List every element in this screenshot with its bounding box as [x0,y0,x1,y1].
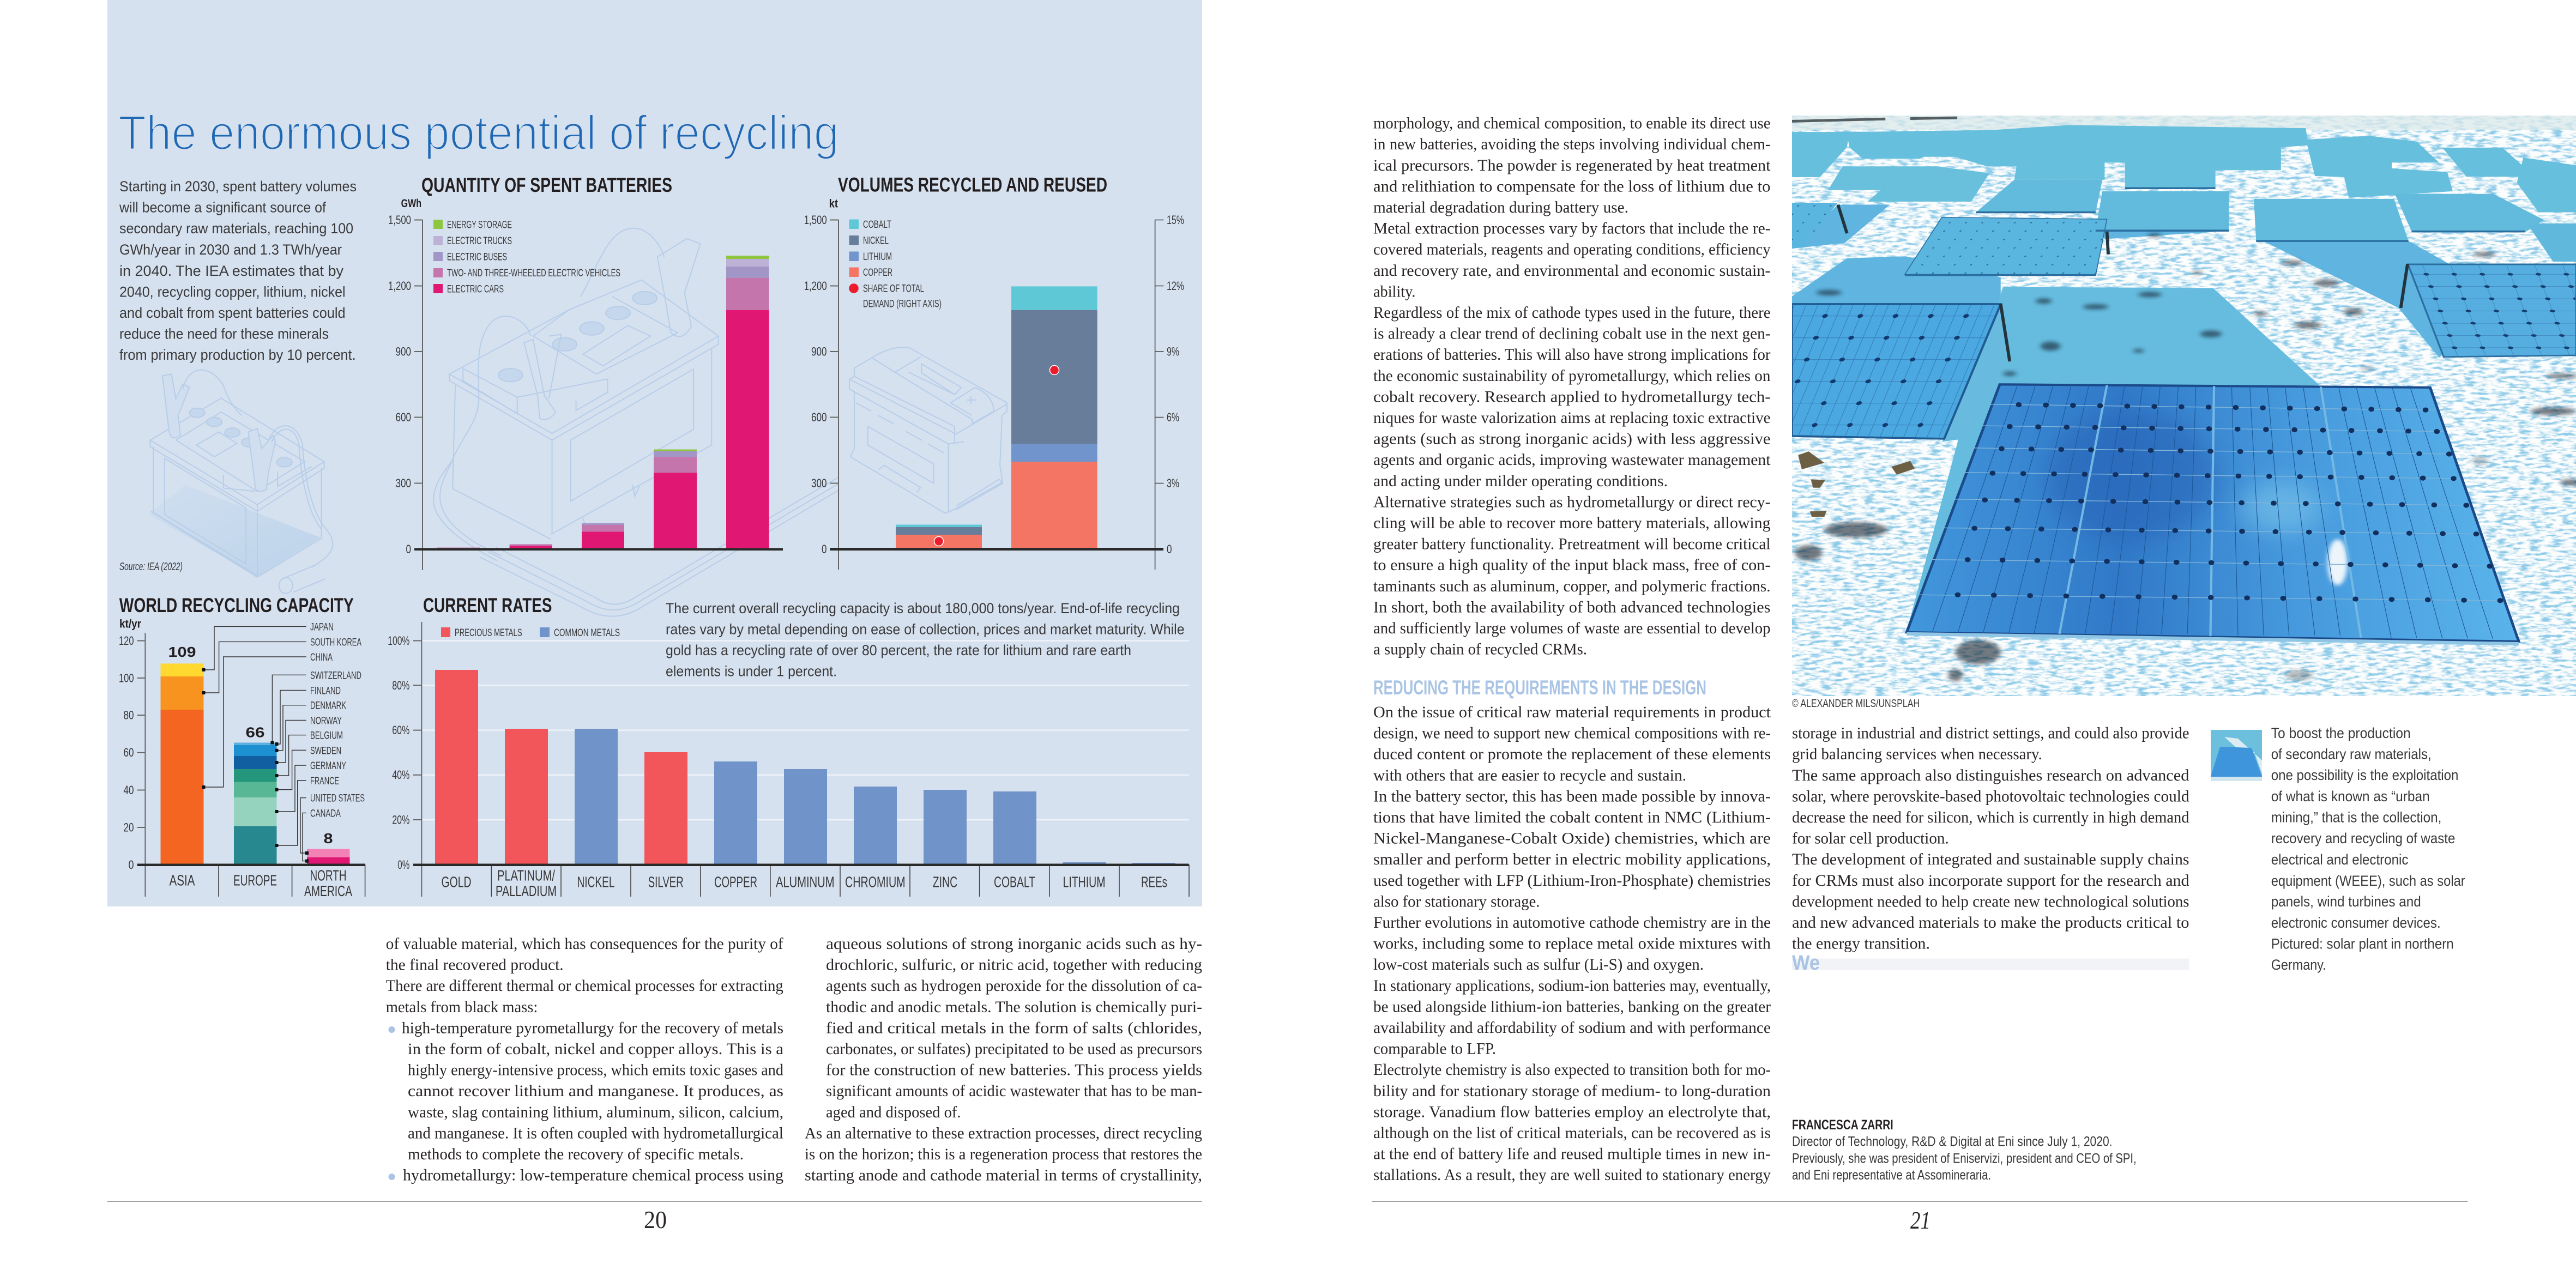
text column: right page, column 2: grid balancing services when necessary. [1792,745,2042,763]
text column: right page, column 2: storage in industrial and district settings, and could also provide [1792,724,2189,742]
illustration: side battery [849,347,1007,513]
text column: right page, column 1 top: cling will be able to recover more battery materials, allowing [1373,514,1771,532]
text column: right page, column 1 top: the economic sustainability of pyrometallurgy, which relies on [1373,367,1771,385]
text column: right page, column 1 bottom: availability and affordability of sodium and with performance [1373,1019,1771,1037]
capacity text block: rates vary by metal depending on ease of collection, prices and market maturity. While [666,621,1185,638]
stacked bars [896,286,1097,548]
text column: right page, column 1 bottom: storage. Vanadium flow batteries employ an electrolyte that, [1373,1103,1771,1121]
text column: right page, column 2: for solar cell production. [1792,830,1949,848]
legend: COPPER [863,267,892,279]
legend: NICKEL [863,235,889,246]
country labels: NORWAY [310,715,342,727]
bar: Asia [160,663,204,863]
text column: right page, column 1 bottom: works, including some to replace metal oxide mixtures with [1373,935,1771,953]
metal labels: NICKEL [577,873,615,890]
sidebar caption: mining,” that is the collection, [2271,809,2441,826]
text column: right page, column 1 top: is already a clear trend of declining cobalt use in the next gen- [1373,325,1771,343]
legend: ELECTRIC CARS [447,283,504,295]
legend: ELECTRIC BUSES [447,252,507,263]
sidebar caption: one possibility is the exploitation [2271,767,2458,783]
text column: left page, column 1: high-temperature pyrometallurgy for the recovery of metals [402,1019,783,1037]
sidebar caption: of secondary raw materials, [2271,746,2432,763]
y axis: 0 [406,542,411,556]
text column: right page, column 1 top: taminants such as aluminum, copper, and polymeric fractions. [1373,577,1771,595]
metal labels: SILVER [648,873,684,890]
left axis [804,213,838,570]
author bio [1792,1117,2137,1183]
text column: right page, column 1 top: Metal extraction processes vary by factors that include the re- [1373,220,1771,238]
text column: right page, column 1 top: material degradation during battery use. [1373,198,1628,216]
country labels: CANADA [310,808,341,819]
metal labels: COBALT [994,873,1035,890]
metal labels: ALUMINUM [776,873,834,890]
text column: right page, column 1 top: cobalt recovery. Research applied to hydrometallurgy tech- [1373,388,1771,406]
text column: right page, column 1 top: in new batteries, avoiding the steps involving individual chem- [1373,135,1771,153]
right axis: 12% [1167,279,1184,293]
country labels: SWITZERLAND [310,670,361,681]
sidebar caption: electronic consumer devices. [2271,915,2441,931]
sidebar caption: equipment (WEEE), such as solar [2271,873,2465,889]
text column: left page, column 2: fied and critical metals in the form of salts (chlorides, [826,1019,1202,1037]
y axis [388,213,423,570]
right axis: 9% [1167,344,1179,359]
bar totals: 8 [324,830,333,846]
text column: left page, column 2: aged and disposed of. [826,1103,961,1121]
y axis: 1,500 [388,213,411,227]
right axis: 6% [1167,410,1179,424]
text column: right page, column 1 bottom: bility and for stationary storage of medium- to long-duration [1373,1082,1771,1100]
sidebar caption: Germany. [2271,957,2326,973]
metal labels: COPPER [714,873,757,890]
intro text block [119,178,357,363]
rocks [1798,451,1915,517]
bar totals: 109 [168,644,196,660]
text column: right page, column 2: the energy transition. [1792,935,1930,953]
photo: solar panels on snow [1792,116,2576,696]
text column: right page, column 1 top: ical precursors. The powder is regenerated by heat treatment [1373,156,1771,174]
text column: right page, column 1 top: and sufficiently large volumes of waste are essential to develop [1373,619,1771,637]
country labels: BELGIUM [310,730,343,742]
capacity text block: gold has a recycling rate of over 80 percent, the rate for lithium and rare earth [666,642,1131,658]
text column: right page, column 1 bottom: comparable to LFP. [1373,1040,1496,1058]
sidebar caption: of what is known as “urban [2271,788,2430,805]
metal labels: GOLD [442,873,471,890]
region labels: EUROPE [233,872,277,889]
text column: right page, column 1 bottom: Nickel-Manganese-Cobalt Oxide) chemistries, which are [1373,830,1771,848]
region labels: AMERICA [304,882,352,899]
y axis: 900 [396,344,411,359]
text column: right page, column 1 bottom: at the end of battery life and reused multiple times in new in- [1373,1145,1771,1163]
right axis: 15% [1167,213,1184,227]
legend [849,219,942,310]
text column: right page, column 1 bottom: On the issue of critical raw material requirements in product [1373,703,1771,721]
baseline [413,863,1189,866]
sidebar caption: panels, wind turbines and [2271,893,2421,910]
text column: right page, column 2: solar, where perovskite-based photovoltaic technologies could [1792,787,2189,805]
country labels: SWEDEN [310,745,341,757]
text column: right page, column 1 top: agents (such as strong inorganic acids) with less aggressive [1373,430,1771,448]
text column: right page, column 1 top: morphology, and chemical composition, to enable its direct use [1373,114,1771,132]
country labels: CHINA [310,652,333,663]
region labels [169,867,352,899]
unit: GWh [401,197,421,210]
sidebar caption: To boost the production [2271,725,2411,741]
title: The enormous potential of recycling [118,105,839,160]
intro text block: GWh/year in 2030 and 1.3 TWh/year [119,241,342,258]
text column: right page, column 2: for CRMs must also incorporate support for the research and [1792,872,2189,890]
author bio: FRANCESCA ZARRI [1792,1117,1893,1133]
text column: right page, column 1 top: and acting under milder operating conditions. [1373,472,1668,490]
left axis: 300 [811,476,827,490]
left axis: 1,500 [804,213,827,227]
y axis: 0 [129,858,134,872]
icon: photo thumbnail [2211,730,2262,781]
intro text block: reduce the need for these minerals [119,326,329,342]
text column: left page, column 2: drochloric, sulfuric, or nitric acid, together with reducing [826,956,1202,974]
text column: left page, column 2: As an alternative to these extraction processes, direct recycling [805,1124,1202,1142]
share of demand dots [934,365,1059,546]
text column: right page, column 2: The development of integrated and sustainable supply chains [1792,850,2189,868]
baseline [414,548,783,551]
bar: Europe [234,742,277,863]
text column: left page, column 2: carbonates, or sulfates) precipitated to be used as precursors [826,1040,1202,1058]
country labels [310,621,365,819]
intro text block: from primary production by 10 percent. [119,347,356,363]
intro text block: Starting in 2030, spent battery volumes [119,178,357,195]
bars [435,670,1175,864]
legend: COMMON METALS [554,627,620,639]
text column: right page, column 1 top: Alternative strategies such as hydrometallurgy or direct recy- [1373,493,1771,511]
right axis [1155,213,1184,570]
gridlines and axis: 100% [388,634,409,648]
left axis: 1,200 [804,279,827,293]
country labels: FINLAND [310,685,341,697]
text column: right page, column 1 bottom: smaller and perform better in electric mobility applications, [1373,850,1771,868]
text column: right page, column 1 top: to ensure a high quality of the input black mass, free of con- [1373,556,1771,574]
text column: left page, column 2 [805,935,1202,1184]
text column: right page, column 1 bottom: used together with LFP (Lithium-Iron-Phosphate) chemistries [1373,872,1771,890]
right axis: 0 [1167,542,1172,556]
intro text block: 2040, recycling copper, lithium, nickel [119,283,346,300]
bar totals: 66 [245,724,265,741]
text column: left page, column 1: cannot recover lithium and manganese. It produces, as [408,1082,783,1100]
country labels: DENMARK [310,700,346,712]
text column: left page, column 1: in the form of cobalt, nickel and copper alloys. This is a [408,1040,783,1058]
text column: right page, column 1 top: greater battery functionality. Pretreatment will become critical [1373,535,1771,553]
chart: current rates [388,594,1189,899]
intro text block: and cobalt from spent batteries could [119,305,346,321]
main panel [1907,384,2519,642]
bar totals [168,644,333,846]
metal labels: CHROMIUM [845,873,906,890]
text column: left page, column 1: the final recovered product. [386,956,564,974]
text column: right page, column 1 bottom [1373,703,1771,1184]
text column: right page, column 1 top: covered materials, reagents and operating conditions, efficiency [1373,240,1771,258]
y axis: 20 [123,821,134,834]
heading: QUANTITY OF SPENT BATTERIES [421,174,672,196]
text column: left page, column 2: is on the horizon; this is a regeneration process that restores the [805,1145,1202,1163]
text column: right page, column 1 bottom: be used alongside lithium-ion batteries, banking on the greater [1373,997,1771,1015]
y axis: 300 [396,476,411,490]
country labels: FRANCE [310,776,339,787]
source note: Source: IEA (2022) [119,561,183,573]
legend [441,627,620,639]
panel: the enormous potential of recycling [107,0,1202,906]
left axis: 0 [822,542,827,556]
We logo end bar: We [1792,952,1820,975]
text column: right page, column 1 top: erations of batteries. This will also have strong implications for [1373,346,1771,364]
metal labels [442,867,1167,899]
gridlines and axis [388,622,1189,897]
author bio: Previously, she was president of Eniservizi, president and CEO of SPI, [1792,1151,2137,1166]
heading: VOLUMES RECYCLED AND REUSED [838,173,1107,196]
country labels: JAPAN [310,621,334,633]
text column: right page, column 1 top: a supply chain of recycled CRMs. [1373,640,1587,658]
legend: ENERGY STORAGE [447,219,512,231]
text column: right page, column 1 top: and recovery rate, and environmental and economic sustain- [1373,262,1771,280]
text column: left page, column 1: methods to complete the recovery of specific metals. [408,1145,744,1163]
text column: right page, column 1 bottom: In the battery sector, this has been made possible by innova- [1373,787,1771,805]
text column: left page, column 2: for the construction of new batteries. This process yields [826,1061,1202,1079]
text column: right page, column 1 bottom: In stationary applications, sodium-ion batteries may, eventually, [1373,977,1771,995]
country labels: SOUTH KOREA [310,637,361,648]
text column: left page, column 2: aqueous solutions of strong inorganic acids such as hy- [826,935,1202,953]
bar: North America [307,849,350,863]
unit: kt/yr [119,618,141,631]
section heading: REDUCING THE REQUIREMENTS IN THE DESIGN [1373,676,1706,699]
capacity text block: elements is under 1 percent. [666,663,837,680]
footer: page 21: 21 [1910,1206,1931,1234]
text column: right page, column 1 bottom: with others that are easier to recycle and sustain. [1373,766,1686,784]
legend: TWO- AND THREE-WHEELED ELECTRIC VEHICLES [447,268,620,279]
intro text block: will become a significant source of [119,199,326,216]
metal labels: REEs [1141,873,1167,890]
legend: ELECTRIC TRUCKS [447,235,512,247]
y axis [119,633,365,897]
y axis: 120 [119,634,134,648]
text column: left page, column 1: There are different thermal or chemical processes for extracting [386,977,783,995]
heading: CURRENT RATES [423,594,552,616]
stacked bars [437,256,769,548]
We logo end bar [1792,952,2189,975]
text column: right page, column 1 top: In short, both the availability of both advanced technologies [1373,598,1771,616]
text column: right page, column 1 bottom: design, we need to support new chemical compositions with re- [1373,724,1771,742]
text column: left page, column 2: agents such as hydrogen peroxide for the dissolution of ca- [826,977,1202,995]
author bio: and Eni representative at Assomineraria. [1792,1168,1991,1183]
text column: left page, column 1 [386,935,783,1184]
right axis: 3% [1167,476,1179,490]
text column: right page, column 1 top: ability. [1373,282,1415,300]
left axis: 600 [811,410,827,424]
y axis: 600 [396,410,411,424]
capacity text block: The current overall recycling capacity is about 180,000 tons/year. End-of-life recycling [666,600,1180,616]
text column: right page, column 2: decrease the need for silicon, which is currently in high demand [1792,808,2189,826]
gridlines and axis: 0% [397,858,409,872]
baseline [830,548,1163,551]
legend: LITHIUM [863,251,892,263]
metal labels: LITHIUM [1063,873,1106,890]
text column: right page, column 1 bottom: tions that have limited the cobalt content in NMC (Lithium- [1373,808,1771,826]
text column: right page, column 1 top: Regardless of the mix of cathode types used in the future, there [1373,304,1771,322]
text column: right page, column 1 bottom: Electrolyte chemistry is also expected to transition both for mo- [1373,1061,1771,1079]
sidebar caption [2211,725,2465,973]
sidebar caption: Pictured: solar plant in northern [2271,936,2454,952]
text column: left page, column 2: significant amounts of acidic wastewater that has to be man- [826,1082,1202,1100]
sidebar caption: electrical and electronic [2271,851,2408,868]
legend: DEMAND (RIGHT AXIS) [863,299,942,310]
metal labels: PALLADIUM [496,882,557,899]
text column: right page, column 2 [1792,724,2189,953]
capacity text block [666,600,1185,680]
text column: left page, column 1: and manganese. It is often coupled with hydrometallurgical [408,1124,783,1142]
text column: right page, column 1 bottom: although on the list of critical materials, can be recovered as is [1373,1124,1771,1142]
text column: left page, column 1: waste, slag containing lithium, aluminum, silicon, calcium, [408,1103,783,1121]
text column: right page, column 2: development needed to help create new technological solutions [1792,892,2189,910]
country labels: UNITED STATES [310,793,365,805]
text column: right page, column 1 top: niques for waste valorization aims at replacing toxic extractive [1373,409,1771,427]
intro text block: secondary raw materials, reaching 100 [119,220,353,237]
text column: right page, column 1 bottom: Further evolutions in automotive cathode chemistry are in the [1373,914,1771,932]
text column: right page, column 1 bottom: stallations. As a result, they are well suited to stationary energy [1373,1166,1771,1184]
gridlines and axis: 20% [392,813,409,826]
y axis: 80 [123,709,134,722]
baseline [137,863,365,866]
snow dirt patches [1795,233,2576,681]
country leader lines [204,626,307,863]
text column: right page, column 1 bottom: duced content or promote the replacement of these elements [1373,745,1771,763]
y axis: 60 [123,746,134,759]
legend: SHARE OF TOTAL [863,283,924,294]
illustration: large car battery with clamps and cable [433,228,838,616]
illustration: small car battery with clamps [149,370,333,594]
y axis: 40 [123,783,134,797]
gridlines and axis: 60% [392,723,409,737]
heading: WORLD RECYCLING CAPACITY [119,594,354,616]
photo credit: © ALEXANDER MILS/UNSPLAH [1792,698,1920,710]
left axis: 900 [811,344,827,359]
text column: left page, column 1: of valuable material, which has consequences for the purity of [386,935,783,953]
text column: left page, column 2: starting anode and cathode material in terms of crystallinity, [805,1166,1202,1184]
metal labels: ZINC [933,873,957,890]
footer: page 20: 20 [644,1206,667,1233]
text column: right page, column 1 top: agents and organic acids, improving wastewater management [1373,451,1771,469]
text column: left page, column 1: hydrometallurgy: low-temperature chemical process using [403,1166,783,1184]
text column: right page, column 1 bottom: low-cost materials such as sulfur (Li-S) and oxygen. [1373,956,1704,973]
unit: kt [829,197,838,210]
text column: right page, column 2: and new advanced materials to make the products critical to [1792,914,2189,932]
metal labels: PLATINUM/ [497,867,555,884]
sidebar caption: recovery and recycling of waste [2271,830,2455,846]
chart: volumes recycled and reused [804,173,1184,570]
chart: world recycling capacity [119,594,365,899]
text column: right page, column 1 top: and relithiation to compensate for the loss of lithium due to [1373,177,1771,195]
region labels: NORTH [310,867,347,884]
region labels: ASIA [169,872,195,889]
gridlines and axis: 80% [392,679,409,692]
legend: COBALT [863,219,891,231]
y axis: 100 [119,672,134,685]
y axis: 1,200 [388,279,411,293]
text column: left page, column 1: highly energy-intensive process, which emits toxic gases and [408,1061,783,1079]
text column: right page, column 1 top [1373,114,1771,658]
text column: left page, column 1: metals from black mass: [386,998,538,1016]
country labels: GERMANY [310,760,346,772]
legend [433,219,620,295]
text column: left page, column 2: thodic and anodic metals. The solution is chemically puri- [826,998,1202,1016]
text column: right page, column 1 bottom: also for stationary storage. [1373,892,1540,910]
author bio: Director of Technology, R&D & Digital at Eni since July 1, 2020. [1792,1134,2112,1150]
intro text block: in 2040. The IEA estimates that by [119,263,343,279]
chart: quantity of spent batteries [388,174,783,570]
text column: right page, column 2: The same approach also distinguishes research on advanced [1792,766,2189,784]
gridlines and axis: 40% [392,768,409,782]
legend: PRECIOUS METALS [455,627,522,639]
